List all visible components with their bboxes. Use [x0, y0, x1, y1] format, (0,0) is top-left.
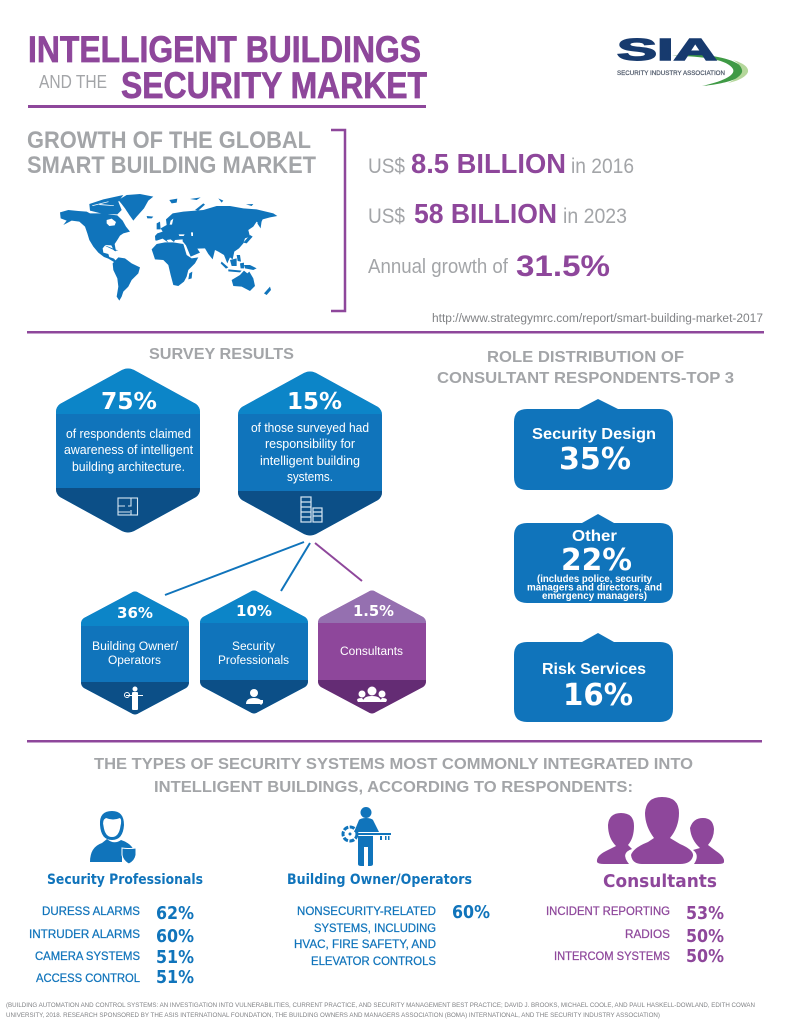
stat: annual growth: Annual growth of	[368, 256, 508, 278]
panel: consultants list	[546, 871, 724, 967]
panel: security design 35%: 35%	[559, 442, 631, 477]
heading: role distribution	[437, 349, 734, 387]
stat: 8.5 billion in 2016: 8.5 BILLION	[411, 148, 566, 179]
panel: security professionals list: 60%	[156, 927, 194, 947]
panel: security professionals list: CAMERA SYSTEMS	[35, 949, 140, 963]
panel: 75% hexagon: awareness of intelligent	[64, 443, 194, 457]
panel: 10% security professionals: Security	[232, 641, 275, 653]
icon: office buildings	[301, 497, 322, 522]
panel: other 22%: (includes police, security	[537, 574, 652, 585]
heading: growth of the global smart building market: SMART BUILDING MARKET	[27, 152, 316, 179]
panel: consultants list: INTERCOM SYSTEMS	[554, 949, 670, 963]
panel: consultants list: RADIOS	[625, 927, 670, 941]
panel: other 22%	[514, 514, 673, 603]
panel: security professionals list: 51%	[156, 968, 194, 988]
panel: building owner/operators list: NONSECURITY-RELATED	[297, 904, 436, 918]
panel: 36% building owner/operators: Building Owner/	[92, 641, 179, 653]
panel: security professionals list: DURESS ALARMS	[42, 904, 140, 918]
stat: 8.5 billion in 2016	[368, 148, 634, 179]
title: AND THE	[39, 72, 107, 92]
panel: 10% security professionals: 10%	[236, 602, 272, 620]
panel: 1.5% consultants	[318, 590, 426, 714]
icon: consultants group	[597, 797, 724, 864]
stat: 8.5 billion in 2016: in 2016	[571, 155, 634, 178]
panel: consultants list: 50%	[686, 947, 724, 967]
panel: security professionals list: Security Professionals	[47, 872, 203, 888]
panel: 15% hexagon: intelligent building	[260, 454, 360, 468]
footnote: UNIVERSITY, 2018. RESEARCH SPONSORED BY THE ASIS INTERNATIONAL FOUNDATION, THE BUILDING OWNERS AND MANAGERS ASSOCIATION (BOMA) INTERNATIONAL, AND THE SECURITY INDUSTRY ASSOCIATION)	[6, 1012, 660, 1019]
logo: SIA: SIA	[617, 32, 717, 67]
stat: 58 billion in 2023	[368, 198, 627, 229]
panel: 15% hexagon: systems.	[287, 470, 333, 484]
heading: role distribution: ROLE DISTRIBUTION OF	[487, 349, 684, 366]
panel: building owner/operators list: SYSTEMS, INCLUDING	[314, 921, 436, 935]
panel: security professionals list: ACCESS CONTROL	[36, 971, 140, 985]
title: INTELLIGENT BUILDINGS	[28, 29, 421, 70]
panel: 36% building owner/operators: Operators	[108, 655, 161, 667]
panel: other 22%: Other	[572, 528, 617, 545]
panel: building owner/operators list: ELEVATOR CONTROLS	[311, 954, 436, 968]
panel: risk services 16%	[514, 633, 673, 722]
panel: 75% hexagon: of respondents claimed	[66, 427, 191, 441]
panel: 10% security professionals	[200, 590, 308, 714]
panel: risk services 16%: Risk Services	[542, 661, 646, 678]
panel: security design 35%	[514, 399, 673, 490]
bracket	[331, 130, 345, 311]
panel: consultants list: Consultants	[603, 871, 717, 892]
panel: security design 35%: Security Design	[532, 426, 656, 443]
stat: 58 billion in 2023: in 2023	[563, 205, 627, 228]
icon: world map	[60, 194, 277, 301]
icon: security professional	[246, 689, 263, 705]
panel: consultants list: INCIDENT REPORTING	[546, 904, 670, 918]
panel: 15% hexagon: 15%	[287, 387, 342, 415]
heading: types of security systems	[94, 756, 693, 796]
panel: building owner/operators list: Building Owner/Operators	[287, 872, 472, 888]
heading: role distribution: CONSULTANT RESPONDENTS-TOP 3	[437, 370, 734, 387]
panel: building owner/operators list: HVAC, FIRE SAFETY, AND	[294, 937, 436, 951]
panel: security professionals list	[29, 872, 203, 988]
panel: security professionals list: 51%	[156, 948, 194, 968]
panel: 15% hexagon: responsibility for	[265, 437, 355, 451]
icon: group of people	[357, 686, 387, 702]
icon: person with key	[343, 807, 391, 866]
heading: types of security systems: THE TYPES OF SECURITY SYSTEMS MOST COMMONLY INTEGRATED INTO	[94, 756, 693, 773]
panel: 36% building owner/operators	[81, 591, 189, 716]
panel: other 22%: managers and directors, and	[527, 582, 662, 594]
heading: survey results: SURVEY RESULTS	[149, 346, 294, 363]
panel: 1.5% consultants: Consultants	[340, 646, 403, 658]
panel: 75% hexagon: 75%	[101, 387, 157, 415]
source url: http://www.strategymrc.com/report/smart-building-market-2017	[432, 313, 763, 325]
panel: 15% hexagon	[238, 371, 382, 537]
panel: building owner/operators list	[287, 872, 490, 968]
panel: 10% security professionals: Professionals	[218, 655, 289, 667]
panel: other 22%: 22%	[561, 543, 632, 578]
panel: 1.5% consultants: 1.5%	[353, 602, 394, 620]
panel: 36% building owner/operators: 36%	[117, 604, 153, 622]
stat: annual growth: 31.5%	[516, 250, 610, 283]
heading: types of security systems: INTELLIGENT BUILDINGS, ACCORDING TO RESPONDENTS:	[154, 779, 633, 796]
connector lines	[165, 542, 362, 595]
panel: 15% hexagon: of those surveyed had	[251, 421, 369, 435]
footnote: (BUILDING AUTOMATION AND CONTROL SYSTEMS: AN INVESTIGATION INTO VULNERABILITIES, CURRENT PRACTICE, AND SECURITY MANAGEMENT BEST PRACTICE; DAVID J. BROOKS, MICHAEL COOLE, AND PAUL HASKELL-DOWLAND, EDITH COWAN	[6, 1002, 755, 1009]
icon: person with key	[124, 686, 143, 710]
icon: security professional	[90, 811, 136, 864]
icon: floor plan	[118, 498, 138, 515]
heading: growth of the global smart building market: GROWTH OF THE GLOBAL	[27, 127, 311, 154]
stat: 58 billion in 2023: US$	[368, 205, 405, 228]
panel: consultants list: 50%	[686, 927, 724, 947]
title: SECURITY MARKET	[121, 65, 427, 106]
panel: other 22%: emergency managers)	[542, 591, 647, 602]
logo: SIA: SECURITY INDUSTRY ASSOCIATION	[617, 71, 725, 77]
footnote	[6, 1002, 755, 1019]
panel: 75% hexagon: building architecture.	[72, 460, 185, 474]
heading: growth of the global smart building market	[27, 127, 316, 179]
stat: 8.5 billion in 2016: US$	[368, 155, 405, 178]
panel: security professionals list: INTRUDER ALARMS	[29, 927, 140, 941]
logo: SIA	[617, 32, 748, 86]
panel: security professionals list: 62%	[156, 904, 194, 924]
panel: risk services 16%: 16%	[563, 678, 633, 713]
panel: building owner/operators list: 60%	[452, 903, 490, 923]
stat: 58 billion in 2023: 58 BILLION	[414, 198, 557, 229]
stat: annual growth	[368, 250, 610, 283]
panel: consultants list: 53%	[686, 904, 724, 924]
panel: 75% hexagon	[56, 368, 200, 534]
title	[28, 29, 427, 108]
